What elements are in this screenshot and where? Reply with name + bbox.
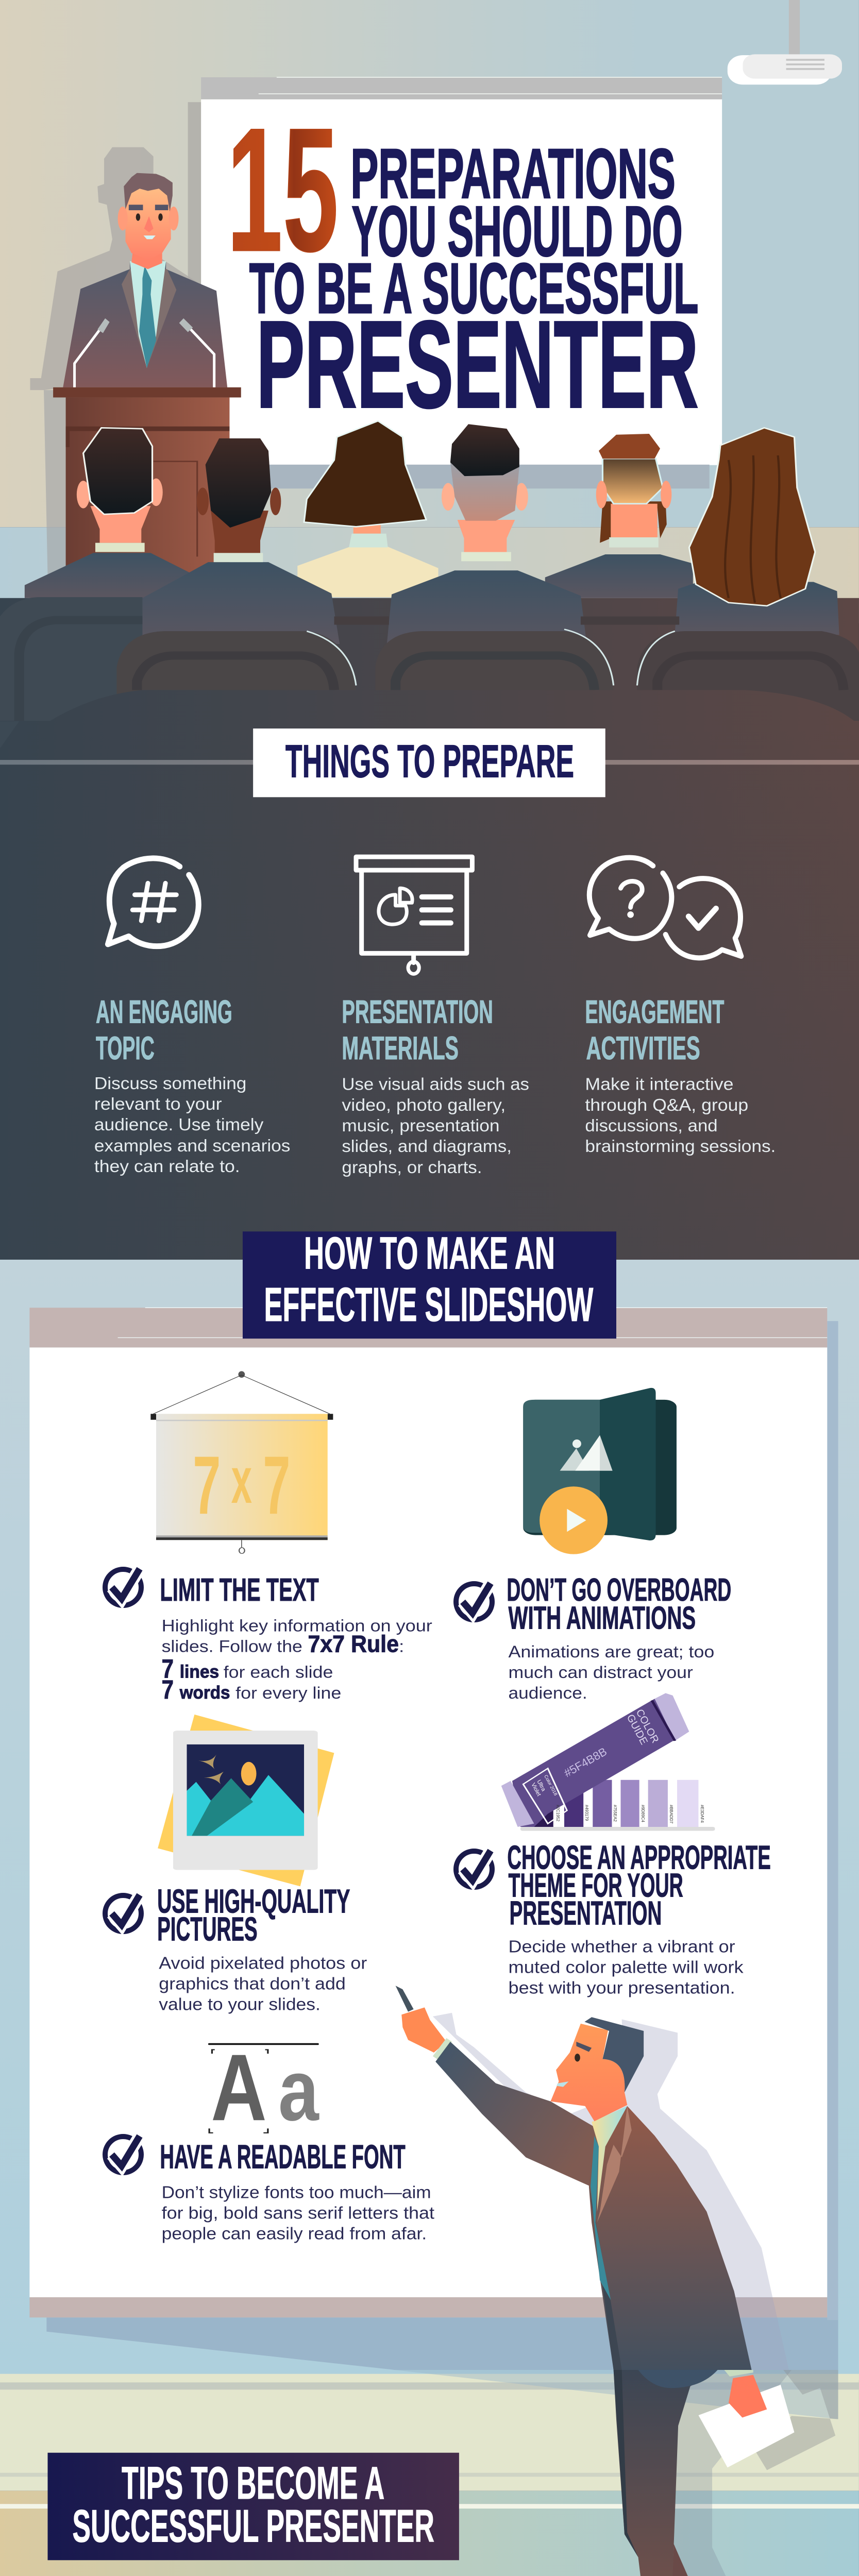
panel: wall background for slideshow section — [0, 1260, 859, 2380]
col 3 text: Make it interactive — [585, 1075, 733, 1094]
icon: color guide swatches: #5F4B8B — [562, 1745, 609, 1780]
icon: 7x7 roll-up screen: 7 — [193, 1439, 221, 1531]
illustration: audience — [0, 421, 859, 722]
person 5 — [545, 434, 693, 598]
item: use high-quality pictures — [105, 1715, 367, 2013]
icon: 7x7 roll-up screen: 7 — [263, 1439, 290, 1531]
icon: color guide swatches: #493179 — [584, 1805, 589, 1821]
icon: color guide swatches: Color 2018 — [543, 1774, 559, 1797]
item: limit the text: 7 — [162, 1654, 174, 1683]
col 3 text: through Q&A, group — [585, 1096, 748, 1114]
icon: color guide swatches: Violet — [530, 1782, 542, 1798]
text: USE HIGH-QUALITY — [157, 1882, 350, 1920]
icon: hashtag speech bubble — [108, 858, 198, 946]
item: limit the text: slides. Follow the — [162, 1637, 302, 1656]
item: use high-quality pictures: PICTURES — [157, 1910, 258, 1948]
icon: checkmark — [456, 1583, 492, 1620]
item: limit the text: Highlight key information on your — [162, 1617, 432, 1635]
icon: Aa type specimen: a — [278, 2042, 319, 2139]
icon: color guide swatches: #755EA2 — [613, 1805, 617, 1822]
col 2 text: graphs, or charts. — [342, 1158, 482, 1177]
col 2 text: slides, and diagrams, — [342, 1137, 512, 1156]
col 1 text: relevant to your — [94, 1095, 222, 1113]
icon: Aa type specimen: A — [211, 2035, 267, 2141]
item: have a readable font — [105, 2035, 434, 2243]
icon: color guide swatches: #9D89C4 — [641, 1805, 645, 1822]
item: use high-quality pictures: Avoid pixelated photos or — [159, 1954, 367, 1972]
heading: how to make an effective slideshow — [243, 1227, 616, 1338]
item: limit the text: lines — [180, 1662, 219, 1682]
illustration: presenter pointing at the screen — [330, 1986, 859, 2576]
item: have a readable font: for big, bold sans serif letters that — [162, 2204, 434, 2223]
col 3 text: discussions, and — [585, 1116, 718, 1135]
item: choose an appropriate theme: best with your presentation. — [509, 1978, 735, 1997]
person 4 — [386, 424, 586, 651]
col 3 text: ACTIVITIES — [586, 1030, 700, 1066]
icon: color guide swatches: COLOR — [634, 1707, 661, 1745]
person 3 — [297, 421, 438, 597]
col 2 text — [342, 994, 529, 1177]
panel: hero auditorium background — [0, 0, 859, 623]
heading: things to prepare — [253, 728, 605, 797]
col 1 text: examples and scenarios — [94, 1136, 290, 1155]
item: limit the text: : — [399, 1637, 405, 1656]
icon: checkmark — [456, 1851, 492, 1887]
col 3 text — [585, 994, 776, 1156]
icon: color guide swatches: #BBADD7 — [669, 1805, 673, 1824]
item: limit the text: words — [179, 1683, 230, 1703]
item: limit the text: 7 — [162, 1675, 174, 1704]
icon: presentation screen with pie chart — [356, 857, 472, 974]
col 2 text: Use visual aids such as — [342, 1075, 529, 1094]
col 3 text: brainstorming sessions. — [585, 1137, 776, 1156]
text: HAVE A READABLE FONT — [160, 2138, 406, 2176]
item: don't go overboard: audience. — [509, 1684, 587, 1703]
col 2 text: video, photo gallery, — [342, 1096, 506, 1114]
item: don't go overboard — [456, 1388, 731, 1703]
col 1 text: they can relate to. — [94, 1157, 240, 1176]
panel: tips background — [0, 2370, 859, 2576]
heading: tips to become a successful presenter — [47, 2453, 459, 2560]
item: limit the text — [105, 1371, 432, 1704]
item: have a readable font: Don’t stylize fonts too much—aim — [162, 2183, 431, 2202]
person 6 — [675, 428, 839, 635]
item: have a readable font: people can easily read from afar. — [162, 2224, 427, 2243]
item: choose an appropriate theme: muted color palette will work — [509, 1958, 744, 1977]
item: don't go overboard: Animations are great; too — [509, 1643, 714, 1661]
col 1 text: AN ENGAGING — [96, 994, 232, 1030]
item: limit the text: 7x7 Rule — [308, 1631, 399, 1657]
item: don't go overboard: much can distract your — [509, 1664, 693, 1682]
seats — [0, 597, 859, 721]
item: limit the text: for every line — [235, 1684, 341, 1703]
icon: color guide swatches: #2C1952 — [555, 1805, 560, 1822]
panel: slideshow screen — [29, 1308, 838, 2370]
illustration: presenter at podium — [30, 147, 227, 575]
col 2 text: music, presentation — [342, 1116, 500, 1135]
icon: ceiling projector — [728, 0, 842, 84]
person 2 — [138, 438, 340, 644]
item: use high-quality pictures: graphics that don’t add — [159, 1974, 346, 1993]
panel: things to prepare — [0, 721, 859, 1267]
col 1 text — [94, 994, 290, 1176]
icon: color guide swatches: GUIDE — [625, 1713, 650, 1747]
person 1 — [25, 428, 194, 598]
icon: question and check bubbles — [589, 858, 741, 958]
podium — [53, 387, 241, 582]
col 1 text: TOPIC — [96, 1030, 155, 1066]
icon: checkmark — [105, 1569, 141, 1605]
icon: color guide swatches: #E3DAF4 — [700, 1805, 704, 1823]
icon: 7x7 roll-up screen: x — [231, 1444, 252, 1517]
icon: checkmark — [105, 2136, 141, 2173]
item: limit the text: for each slide — [224, 1663, 333, 1682]
icon: checkmark — [105, 1895, 141, 1931]
icon: video book — [523, 1388, 677, 1554]
item: choose an appropriate theme: Decide whether a vibrant or — [509, 1937, 735, 1956]
text: TIPS TO BECOME A — [122, 2458, 384, 2509]
icon: photo frame — [158, 1715, 334, 1886]
title: 15 — [227, 91, 339, 288]
item: choose an appropriate theme — [456, 1693, 771, 1997]
panel: things to prepare: PRESENTATION — [342, 994, 493, 1030]
title — [227, 91, 698, 433]
item: use high-quality pictures: value to your slides. — [159, 1995, 321, 2013]
icon: color guide swatches: Ultra — [535, 1779, 547, 1793]
icon: color guide swatches — [501, 1693, 715, 1831]
col 1 text: audience. Use timely — [94, 1115, 264, 1134]
icon: 7x7 roll-up screen — [150, 1371, 333, 1553]
col 2 text: MATERIALS — [342, 1030, 459, 1066]
item: limit the text: LIMIT THE TEXT — [160, 1572, 319, 1608]
col 1 text: Discuss something — [94, 1074, 246, 1093]
projection screen — [188, 77, 722, 488]
